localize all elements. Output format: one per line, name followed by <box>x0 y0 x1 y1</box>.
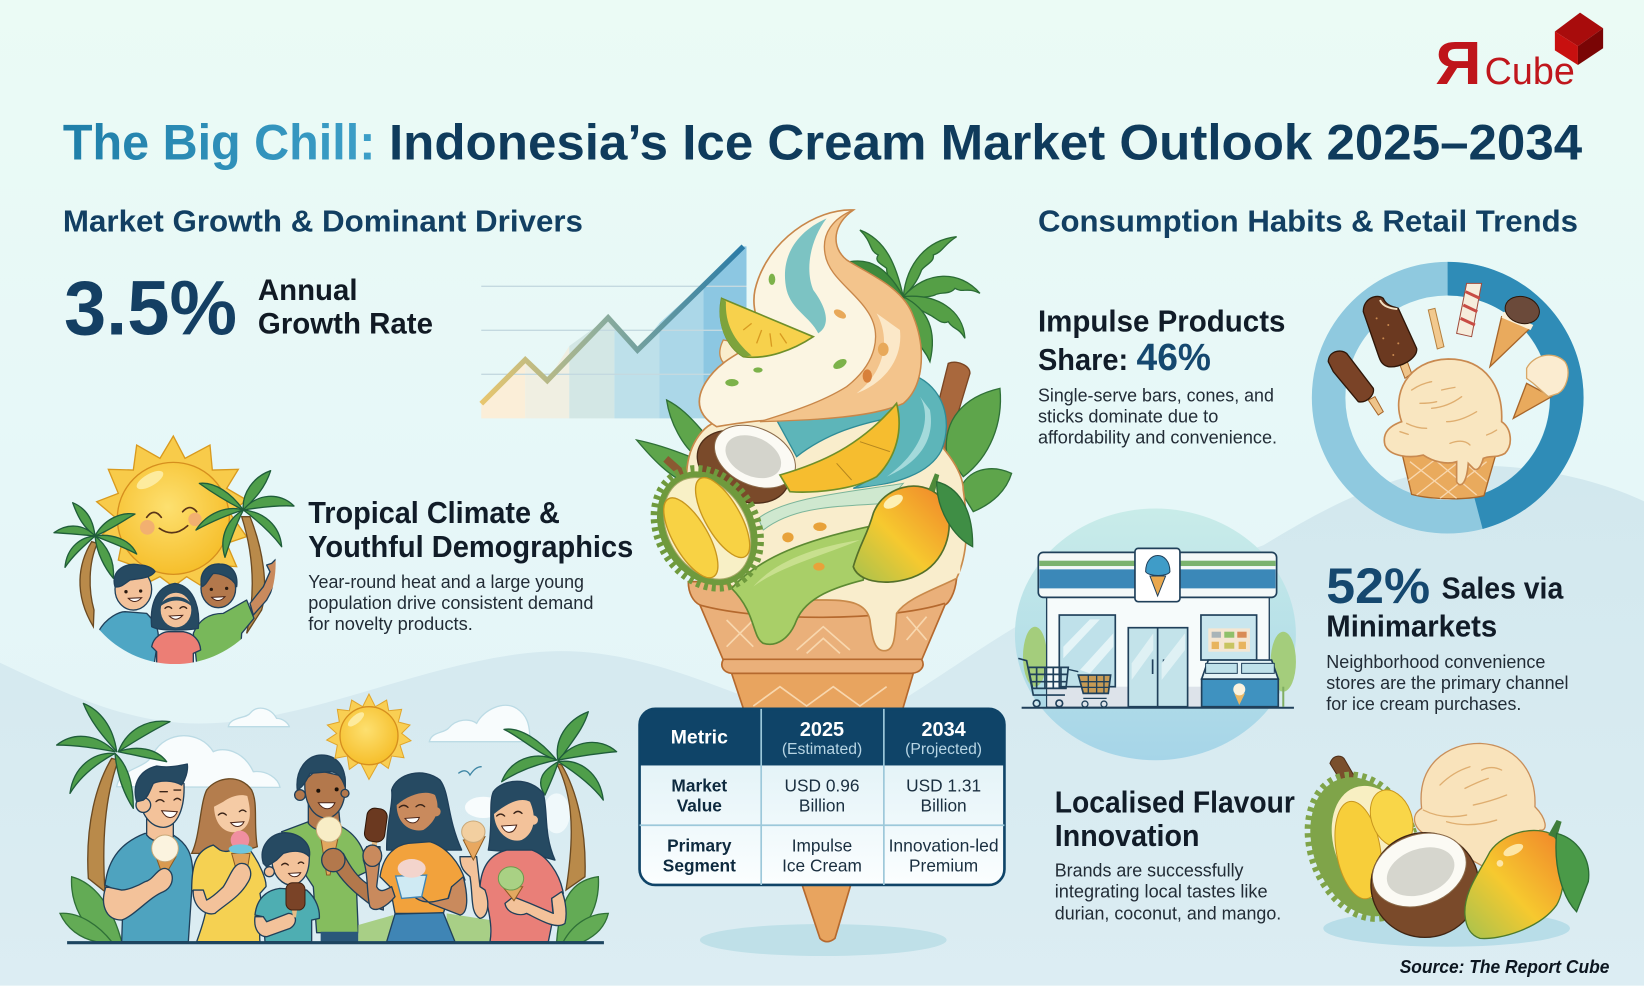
person: woman in yellow <box>192 779 266 942</box>
text: tropical climate: for novelty products. <box>308 613 473 634</box>
comparison table: Segment <box>663 855 736 875</box>
text: minimarkets: Sales via <box>1442 572 1564 606</box>
side leaves <box>637 388 1012 512</box>
stat: annual growth rate: Growth Rate <box>258 307 433 340</box>
text: impulse products: Share: <box>1038 343 1128 377</box>
lower cone <box>732 673 913 942</box>
illustration: local fruits <box>1290 743 1589 947</box>
big waffle cone <box>1402 452 1497 499</box>
chocolate bar large <box>1363 296 1417 378</box>
illustration: sun with family in circle <box>54 436 294 670</box>
big scoop <box>1384 359 1510 485</box>
comparison table: USD 0.96 <box>785 776 859 796</box>
chocolate cone <box>1490 293 1542 367</box>
stat: annual growth rate: 3.5% <box>64 266 237 351</box>
stat: annual growth rate <box>64 266 433 351</box>
title: Indonesia’s Ice Cream Market Outlook 2025–2034 <box>389 113 1582 170</box>
right half of scene <box>327 694 617 942</box>
text: minimarkets: stores are the primary channel <box>1326 672 1569 693</box>
left half of scene <box>57 703 383 942</box>
awning <box>1038 552 1277 597</box>
comparison table: Innovation-led <box>889 835 999 855</box>
comparison table <box>640 709 1004 885</box>
text: localised flavour <box>1055 786 1295 924</box>
thin stick <box>1428 308 1444 349</box>
durian <box>1290 756 1437 933</box>
comparison table: Market <box>671 776 727 796</box>
cinnamon stick <box>927 362 970 457</box>
text: impulse products <box>1038 304 1285 448</box>
person: woman in orange <box>363 773 467 942</box>
heading: market growth: Market Growth & Dominant Drivers <box>63 205 583 239</box>
comparison table: Premium <box>909 855 978 875</box>
text: localised flavour: integrating local tastes like <box>1055 881 1268 902</box>
clouds <box>117 708 289 787</box>
left palm tree <box>57 703 170 892</box>
person: woman in pink <box>460 781 566 942</box>
clouds <box>429 705 570 833</box>
foliage left <box>60 877 122 942</box>
text: minimarkets: 52% <box>1326 557 1430 614</box>
illustration: convenience store <box>1015 509 1296 760</box>
teal band <box>777 375 946 488</box>
mango <box>1465 820 1589 939</box>
line chart: growth <box>481 246 747 418</box>
illustration: ice cream cone <box>633 210 1012 956</box>
comparison table: Billion <box>921 796 967 816</box>
comparison table: Value <box>677 796 722 816</box>
ice cream scoop <box>1414 743 1545 868</box>
coconut <box>685 413 806 517</box>
trees <box>1023 627 1296 707</box>
mango <box>853 473 973 582</box>
durian <box>633 449 781 607</box>
text: tropical climate: Tropical Climate & <box>308 496 560 530</box>
wafer stick <box>1457 283 1482 337</box>
shop sign <box>1135 548 1180 602</box>
text: localised flavour: Localised Flavour <box>1055 786 1295 820</box>
person: man in green <box>282 755 383 942</box>
building <box>1047 597 1269 707</box>
cup rim <box>722 659 923 673</box>
text: minimarkets: for ice cream purchases. <box>1326 693 1521 714</box>
freezer <box>1202 660 1278 707</box>
text: tropical climate: Year-round heat and a large young <box>308 571 584 592</box>
green melting band <box>732 527 868 644</box>
sun <box>327 694 411 779</box>
comparison table: Impulse <box>792 835 852 855</box>
text: impulse products: sticks dominate due to <box>1038 406 1218 427</box>
left window <box>1059 615 1115 687</box>
text: impulse products: Impulse Products <box>1038 304 1285 338</box>
family group <box>99 558 276 664</box>
top swirl <box>699 210 921 427</box>
left palm <box>54 503 137 627</box>
comparison table: Ice Cream <box>782 855 862 875</box>
vanilla cone <box>1513 355 1568 418</box>
right palm <box>196 471 294 633</box>
frozen treats in donut <box>1328 283 1568 499</box>
text: minimarkets: Neighborhood convenience <box>1326 651 1545 672</box>
pineapple wedge <box>720 298 813 357</box>
comparison table: USD 1.31 <box>906 776 981 796</box>
smiling sun <box>97 436 247 587</box>
logo: Я <box>1435 29 1481 97</box>
text: localised flavour: Brands are successfully <box>1055 860 1244 881</box>
waving man <box>192 558 276 662</box>
comparison table: 2025 <box>800 719 844 741</box>
right palm tree <box>502 712 617 890</box>
palm leaves behind swirl <box>850 230 980 362</box>
comparison table: Metric <box>671 726 728 748</box>
text: impulse products: 46% <box>1137 336 1211 378</box>
right window with menu <box>1201 615 1257 660</box>
person: boy <box>255 833 319 942</box>
comparison table: (Projected) <box>905 741 982 758</box>
text: localised flavour: Innovation <box>1055 819 1199 853</box>
heading: consumption habits: Consumption Habits & Retail Trends <box>1038 205 1578 239</box>
source note: Source: The Report Cube <box>1400 956 1609 977</box>
donut chart: impulse share 46% <box>1328 279 1568 517</box>
ground line <box>67 941 604 944</box>
text: impulse products: Single-serve bars, cones, and <box>1038 385 1274 406</box>
text: tropical climate <box>308 496 633 634</box>
illustration: family eating ice cream <box>57 694 617 943</box>
tan shopping basket cart <box>1068 669 1111 707</box>
blue shopping cart <box>1018 658 1068 707</box>
text: tropical climate: Youthful Demographics <box>308 530 633 564</box>
pale green band <box>758 479 963 583</box>
green mounds <box>358 913 490 942</box>
text: localised flavour: durian, coconut, and mango. <box>1055 903 1281 924</box>
man in blue <box>98 564 158 670</box>
comparison table: (Estimated) <box>782 741 862 758</box>
mango slice <box>780 403 899 492</box>
girl in pink <box>151 583 201 667</box>
comparison table: 2034 <box>921 719 966 741</box>
comparison table: Primary <box>667 835 732 855</box>
double door <box>1128 628 1188 707</box>
logo: Cube <box>1485 50 1575 92</box>
bird <box>458 767 482 775</box>
green mound <box>358 922 380 940</box>
title: The Big Chill: <box>63 113 375 170</box>
logo <box>1435 13 1603 97</box>
coconut half <box>1362 821 1479 937</box>
comparison table: Billion <box>799 796 845 816</box>
text: minimarkets <box>1326 557 1569 714</box>
text: impulse products: affordability and convenience. <box>1038 427 1277 448</box>
person: man in blue <box>104 764 193 942</box>
shadow under cone <box>700 924 947 956</box>
text: minimarkets: Minimarkets <box>1326 609 1497 643</box>
foliage right <box>557 877 608 942</box>
wafer cup <box>688 578 957 660</box>
stat: annual growth rate: Annual <box>258 274 358 307</box>
chocolate bar small <box>1328 351 1383 415</box>
cream base <box>687 403 966 651</box>
text: tropical climate: population drive consistent demand <box>308 592 593 613</box>
